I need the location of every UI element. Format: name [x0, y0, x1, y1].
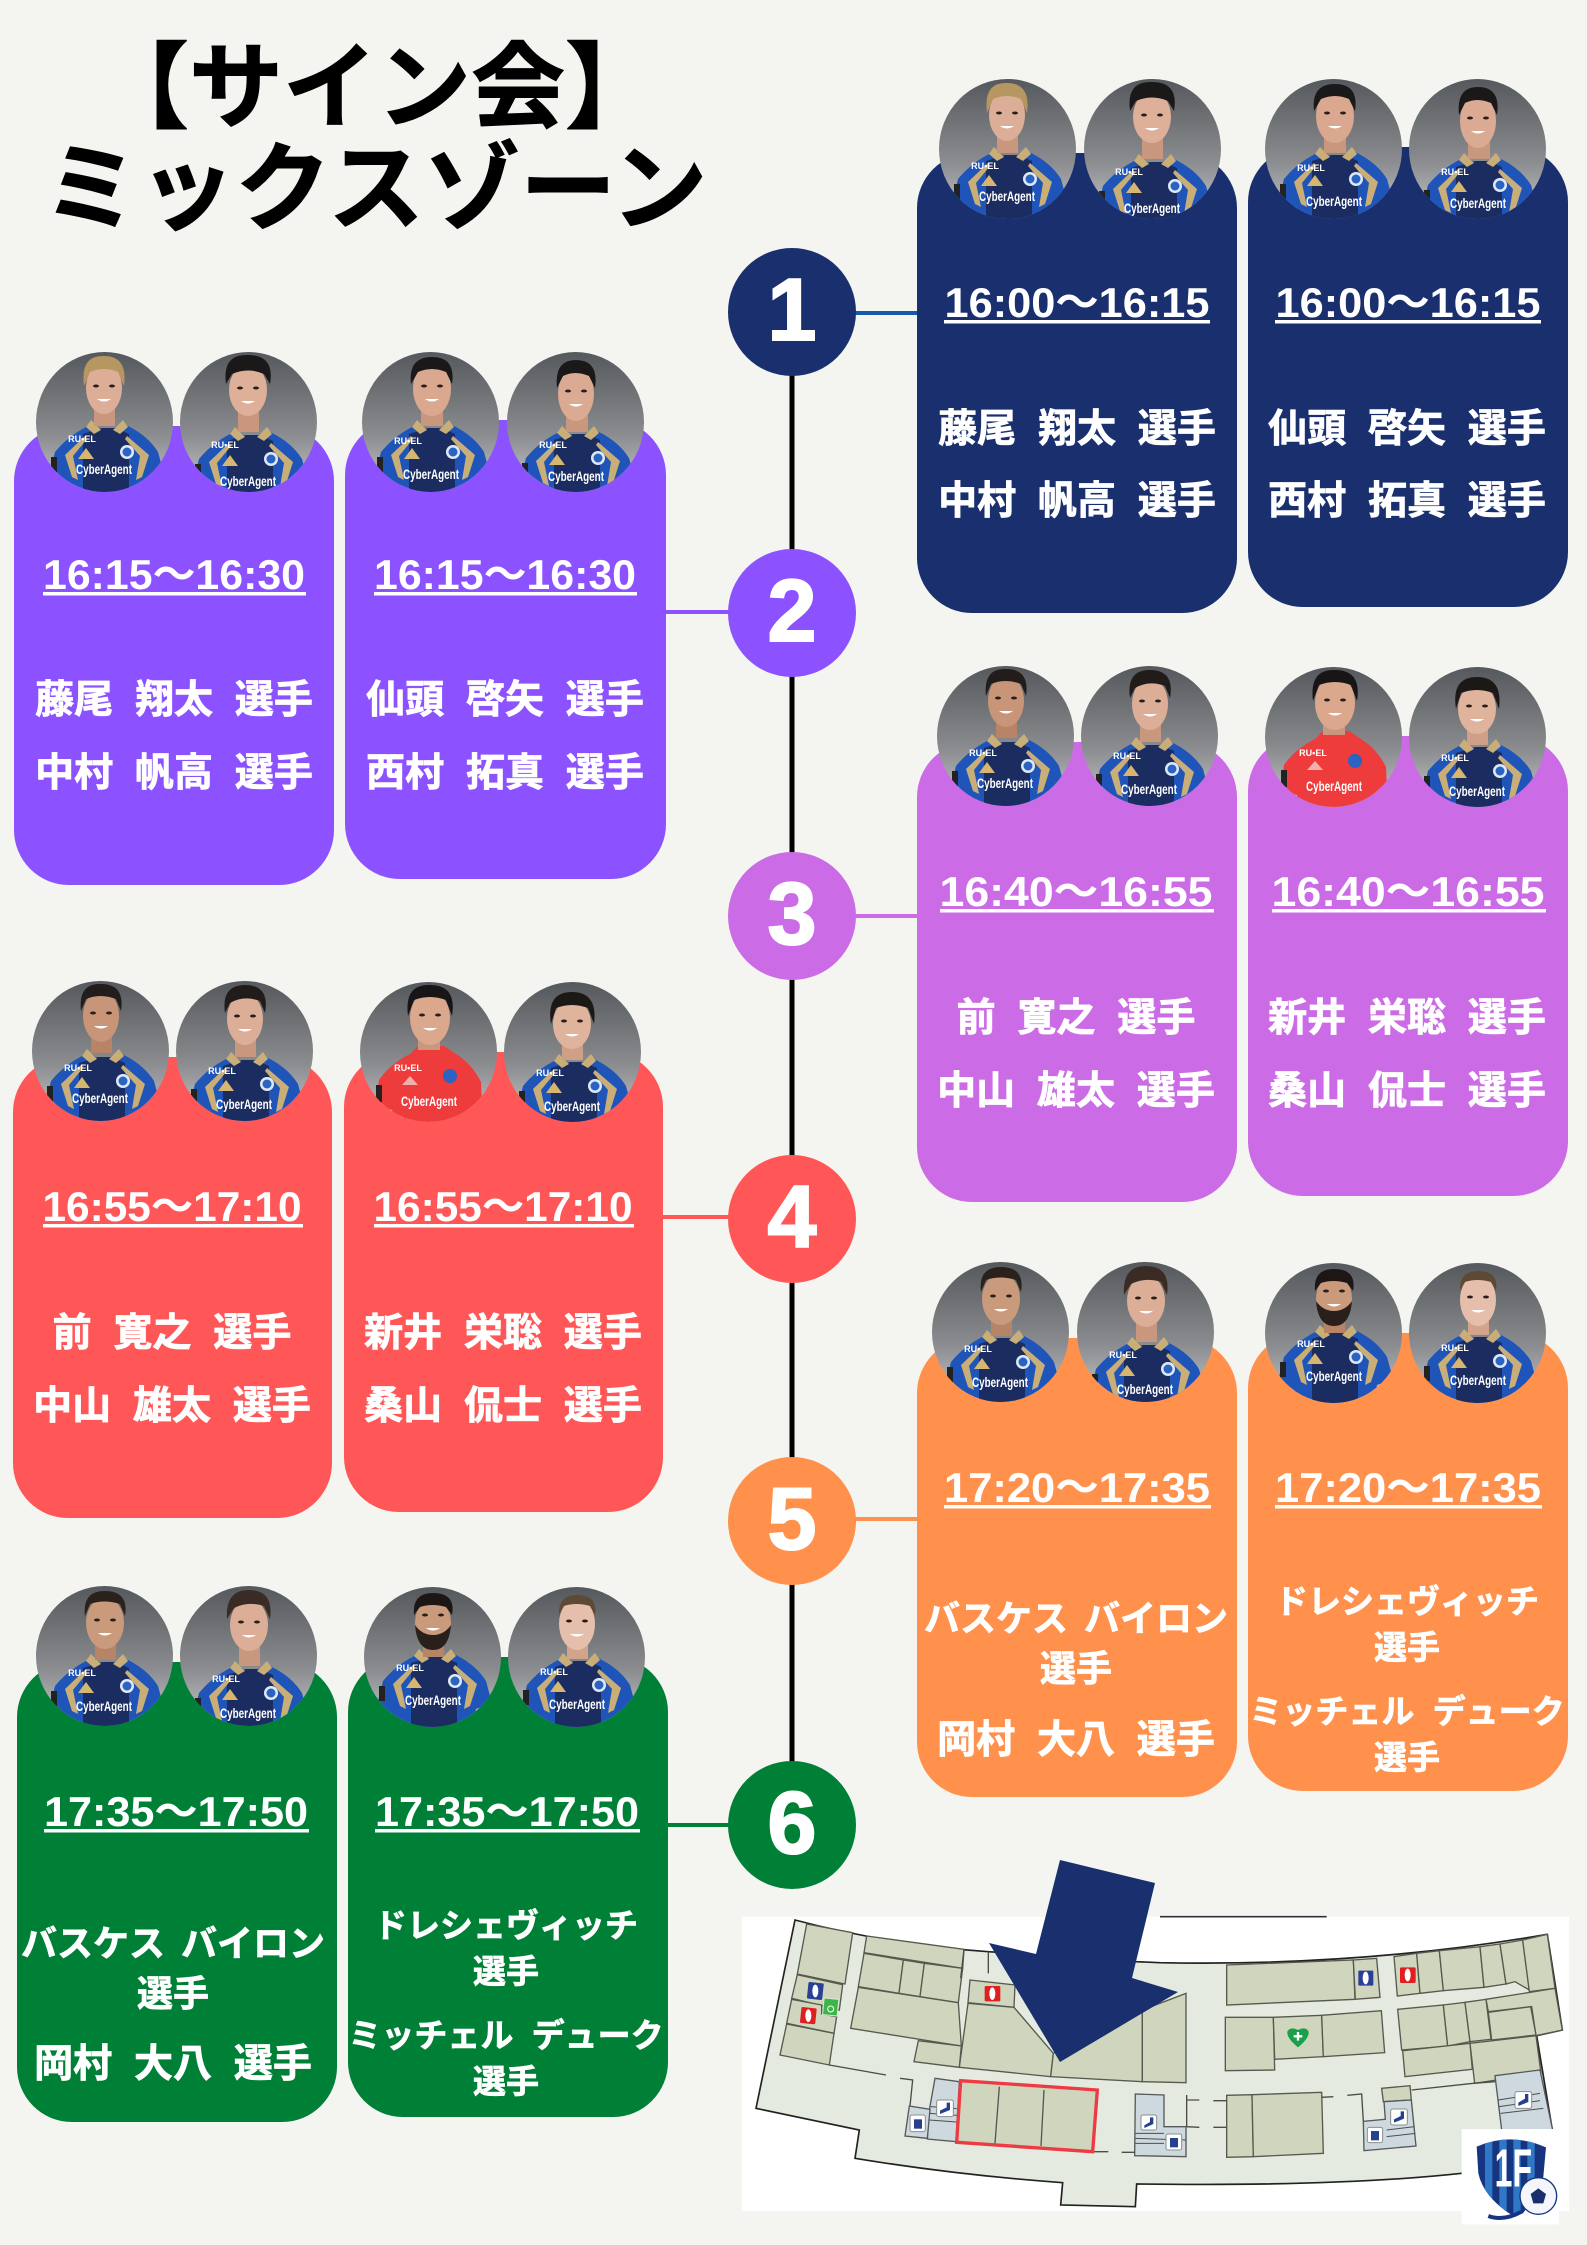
panel: slot 5 left	[917, 1262, 1237, 1797]
player photo: Mitchell: RU•EL	[540, 1667, 568, 1677]
panel: slot 4 right	[344, 982, 663, 1512]
player photo: Mae	[32, 981, 169, 1131]
player photo: Sendo: CyberAgent	[403, 466, 459, 482]
time: 17:35～17:50	[375, 1788, 639, 1835]
names: 藤尾 翔太 選手	[35, 679, 313, 722]
arrow	[989, 1860, 1178, 2062]
names: 前 寛之 選手	[53, 1312, 291, 1355]
player photo: Fujio: RU•EL	[971, 161, 999, 171]
names: ドレシェヴィッチ	[374, 1907, 638, 1944]
names	[1268, 408, 1546, 523]
names	[937, 997, 1215, 1113]
player photo: Nakayama	[1081, 666, 1218, 819]
title: 【サイン会】	[95, 35, 659, 140]
timeline node 2	[728, 549, 856, 677]
player photo: Nishimura	[507, 352, 644, 492]
player photo: Okamura: RU•EL	[212, 1674, 240, 1684]
player photo: Nishimura: CyberAgent	[548, 468, 604, 484]
title	[43, 35, 707, 243]
player photo: Vasquez: RU•EL	[964, 1344, 992, 1354]
names: 選手	[137, 1973, 209, 2014]
timeline node 1: 1	[768, 260, 816, 359]
wheelchair icon	[823, 1998, 839, 2016]
player photo: Nakayama	[176, 981, 313, 1134]
time: 16:55～17:10	[374, 1183, 632, 1230]
names: 岡村 大八 選手	[34, 2043, 312, 2086]
player photo: Mitchell	[1409, 1263, 1546, 1411]
player photo: Fujio: CyberAgent	[76, 461, 132, 477]
names: ドレシェヴィッチ	[1275, 1583, 1539, 1620]
time: 17:20～17:35	[1275, 1464, 1541, 1511]
player photo: Okamura: RU•EL	[1109, 1350, 1137, 1360]
player photo: Arai	[360, 982, 497, 1132]
names	[35, 679, 313, 795]
player photo: Nakayama: RU•EL	[1113, 751, 1141, 761]
player photo: Vasquez: RU•EL	[68, 1668, 96, 1678]
names: 藤尾 翔太 選手	[938, 408, 1216, 451]
player photo: Arai: CyberAgent	[1306, 778, 1362, 794]
player photo: Nakamura: CyberAgent	[1124, 200, 1180, 216]
timeline vertical line	[790, 312, 794, 1825]
player photo: Nishimura: RU•EL	[1441, 167, 1469, 177]
names: バスケス バイロン	[924, 1598, 1228, 1639]
timeline node 6	[728, 1761, 856, 1889]
names	[938, 408, 1216, 523]
connector 4	[663, 1215, 792, 1219]
timeline node 6: 6	[768, 1773, 816, 1872]
panel: slot 2 left	[14, 352, 334, 885]
player photo: Kuwayama: RU•EL	[536, 1068, 564, 1078]
connector 5	[792, 1517, 917, 1521]
connector 3	[792, 914, 917, 918]
player photo: Fujio: CyberAgent	[979, 188, 1035, 204]
panel: slot 3 right	[1248, 667, 1568, 1196]
time: 16:15～16:30	[43, 551, 305, 598]
player photo: Arai: RU•EL	[394, 1063, 422, 1073]
player photo: Kuwayama: CyberAgent	[1449, 783, 1505, 799]
names: 選手	[1374, 1629, 1440, 1666]
player photo: Okamura: CyberAgent	[220, 1705, 276, 1721]
player photo: Kuwayama: RU•EL	[1441, 753, 1469, 763]
floor badge logo 1F	[1462, 2129, 1559, 2224]
player photo: Kuwayama	[1409, 667, 1546, 821]
player photo: Nishimura: RU•EL	[539, 440, 567, 450]
names: 中村 帆高 選手	[938, 480, 1216, 523]
timeline node 5	[728, 1457, 856, 1585]
player photo: Mae: CyberAgent	[72, 1090, 128, 1106]
player photo: Mae: RU•EL	[969, 748, 997, 758]
names	[924, 1598, 1228, 1762]
player photo: Mae	[937, 666, 1074, 816]
names	[1249, 1583, 1565, 1776]
player photo: Nishimura	[1409, 79, 1546, 219]
connector 2	[666, 610, 792, 614]
title: ミックスゾーン	[43, 136, 707, 243]
names: 西村 拓真 選手	[366, 752, 644, 795]
player photo: Mitchell: RU•EL	[1441, 1343, 1469, 1353]
timeline node 3: 3	[768, 864, 816, 963]
names: 中山 雄太 選手	[33, 1385, 311, 1428]
floor map	[742, 1917, 1569, 2211]
player photo: Mitchell: CyberAgent	[1450, 1372, 1506, 1388]
panel: slot 5 right	[1248, 1263, 1568, 1791]
names	[21, 1923, 325, 2086]
names	[348, 1907, 664, 2100]
names: 桑山 侃士 選手	[364, 1385, 642, 1428]
player photo: Okamura	[1077, 1262, 1214, 1402]
player photo: Mitchell: CyberAgent	[549, 1696, 605, 1712]
panel: slot 4 left	[13, 981, 332, 1518]
player photo: Vasquez	[932, 1262, 1069, 1412]
player photo: Okamura: CyberAgent	[1117, 1381, 1173, 1397]
player photo: Sendo: RU•EL	[394, 436, 422, 446]
names: 中村 帆高 選手	[35, 752, 313, 795]
timeline node 4: 4	[768, 1167, 817, 1266]
player photo: Nakamura: RU•EL	[1115, 167, 1143, 177]
player photo: Nakamura	[1084, 79, 1221, 219]
player photo: Dresevic: CyberAgent	[405, 1692, 461, 1708]
player photo: Dresevic	[1265, 1263, 1402, 1407]
names: 岡村 大八 選手	[937, 1719, 1215, 1762]
names: ミッチェル デューク	[1249, 1693, 1565, 1730]
timeline node 1	[728, 248, 856, 376]
player photo: Sendo	[362, 352, 499, 502]
timeline node 3	[728, 852, 856, 980]
restroom icons	[800, 1967, 1416, 2024]
names: 新井 栄聡 選手	[1268, 997, 1546, 1040]
player photo: Sendo	[1265, 79, 1402, 229]
names: 選手	[473, 1953, 539, 1990]
AED icon	[1287, 2028, 1309, 2047]
names: 前 寛之 選手	[957, 997, 1195, 1040]
player photo: Arai: CyberAgent	[401, 1093, 457, 1109]
player photo: Kuwayama	[504, 982, 641, 1136]
player photo: Vasquez: CyberAgent	[972, 1374, 1028, 1390]
names: 中山 雄太 選手	[937, 1070, 1215, 1113]
player photo: Mae: CyberAgent	[977, 775, 1033, 791]
player photo: Dresevic: CyberAgent	[1306, 1368, 1362, 1384]
panel: slot 6 left	[17, 1586, 337, 2122]
player photo: Fujio: RU•EL	[68, 434, 96, 444]
player photo: Arai: RU•EL	[1299, 748, 1327, 758]
player photo: Sendo: RU•EL	[1297, 163, 1325, 173]
player photo: Mae: RU•EL	[64, 1063, 92, 1073]
names: バスケス バイロン	[21, 1923, 325, 1964]
elevator and stair icons	[910, 2092, 1532, 2150]
timeline node 5: 5	[768, 1469, 816, 1568]
names: 選手	[1374, 1739, 1440, 1776]
player photo: Dresevic	[364, 1587, 501, 1731]
player photo: Mitchell	[508, 1587, 645, 1735]
player photo: Fujio	[36, 352, 173, 502]
player photo: Nakamura: RU•EL	[211, 440, 239, 450]
player photo: Sendo: CyberAgent	[1306, 193, 1362, 209]
connector 6	[668, 1823, 792, 1827]
highlighted area	[957, 2081, 1097, 2152]
time: 16:40～16:55	[1272, 868, 1544, 915]
player photo: Nakayama: CyberAgent	[1121, 781, 1177, 797]
time: 17:20～17:35	[944, 1464, 1210, 1511]
panel: slot 2 right	[345, 352, 666, 879]
names: 桑山 侃士 選手	[1268, 1070, 1546, 1113]
names	[366, 679, 644, 795]
player photo: Nishimura: CyberAgent	[1450, 195, 1506, 211]
player photo: Nakamura	[180, 352, 317, 492]
time: 16:00～16:15	[1276, 279, 1540, 326]
names: 選手	[1040, 1648, 1112, 1689]
floor badge logo 1F: 1F	[1495, 2140, 1532, 2199]
panel: slot 3 left	[917, 666, 1237, 1202]
time: 16:40～16:55	[940, 868, 1212, 915]
panel: slot 6 right	[348, 1587, 668, 2117]
player photo: Kuwayama: CyberAgent	[544, 1098, 600, 1114]
player photo: Nakayama: CyberAgent	[216, 1096, 272, 1112]
names: ミッチェル デューク	[348, 2017, 664, 2054]
names: 西村 拓真 選手	[1268, 480, 1546, 523]
time: 17:35～17:50	[44, 1788, 308, 1835]
time: 16:00～16:15	[944, 279, 1210, 326]
time: 16:55～17:10	[42, 1183, 302, 1230]
player photo: Dresevic: RU•EL	[396, 1663, 424, 1673]
names: 仙頭 啓矢 選手	[1268, 408, 1546, 451]
names: 選手	[473, 2063, 539, 2100]
player photo: Dresevic: RU•EL	[1297, 1339, 1325, 1349]
panel: slot 1 right	[1248, 79, 1568, 607]
player photo: Nakayama: RU•EL	[208, 1066, 236, 1076]
player photo: Nakamura: CyberAgent	[220, 473, 276, 489]
player photo: Okamura	[180, 1586, 317, 1726]
time: 16:15～16:30	[374, 551, 636, 598]
player photo: Vasquez: CyberAgent	[76, 1698, 132, 1714]
connector 1	[792, 311, 917, 315]
names: 仙頭 啓矢 選手	[366, 679, 644, 722]
names	[364, 1312, 642, 1428]
timeline node 2: 2	[768, 561, 816, 660]
player photo: Vasquez	[36, 1586, 173, 1736]
panel: slot 1 left	[917, 79, 1237, 613]
timeline node 4	[728, 1155, 856, 1283]
player photo: Arai	[1265, 667, 1402, 817]
player photo: Fujio	[939, 79, 1076, 229]
names	[1268, 997, 1546, 1113]
names: 新井 栄聡 選手	[364, 1312, 642, 1355]
names	[33, 1312, 311, 1428]
